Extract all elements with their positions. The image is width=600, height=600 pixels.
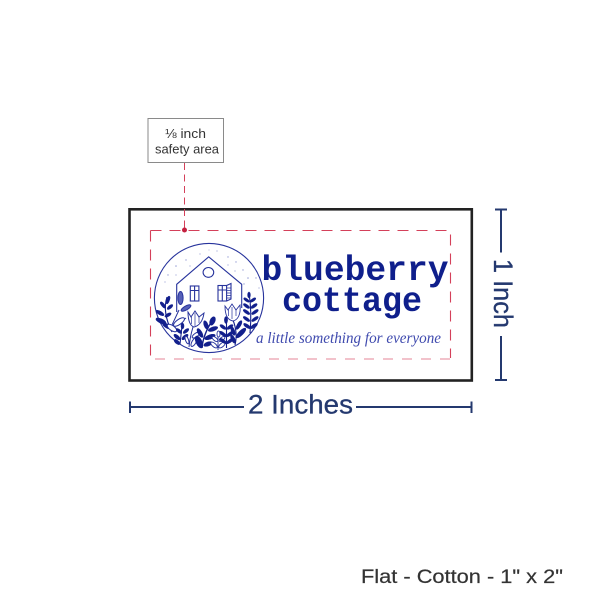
safety area callout box <box>148 118 224 162</box>
logo wordmark: blueberry <box>262 251 448 291</box>
tall pale leaf stem <box>166 292 192 333</box>
left tulip <box>184 311 204 347</box>
right stalk <box>243 292 259 333</box>
emblem circle <box>154 243 264 353</box>
sky dots <box>164 250 260 289</box>
logo tagline: a little something for everyone <box>256 330 441 347</box>
logo emblem: house in circle with flowers <box>154 243 264 353</box>
width dimension: 2 inches <box>130 390 472 420</box>
house <box>177 257 242 312</box>
safety area dashed border <box>150 230 450 359</box>
product caption: Flat - Cotton - 1" x 2" <box>361 567 563 588</box>
logo wordmark: cottage <box>282 282 422 322</box>
height dimension: 1 inch: 1 Inch <box>488 259 518 328</box>
callout leader line <box>182 163 187 232</box>
logo wordmark <box>262 251 448 322</box>
height dimension: 1 inch <box>488 210 518 380</box>
right tulip <box>225 304 247 345</box>
label outline <box>130 209 472 380</box>
second dark stalk <box>173 323 190 346</box>
centre branch <box>194 316 218 349</box>
plants <box>155 292 259 350</box>
middle dark sprig <box>219 316 234 348</box>
left stalk <box>155 296 174 332</box>
small pale sprig <box>210 331 226 350</box>
safety area callout box: ⅛ inch <box>165 127 206 141</box>
width dimension: 2 inches: 2 Inches <box>248 390 353 420</box>
safety area callout box: safety area <box>155 142 219 156</box>
